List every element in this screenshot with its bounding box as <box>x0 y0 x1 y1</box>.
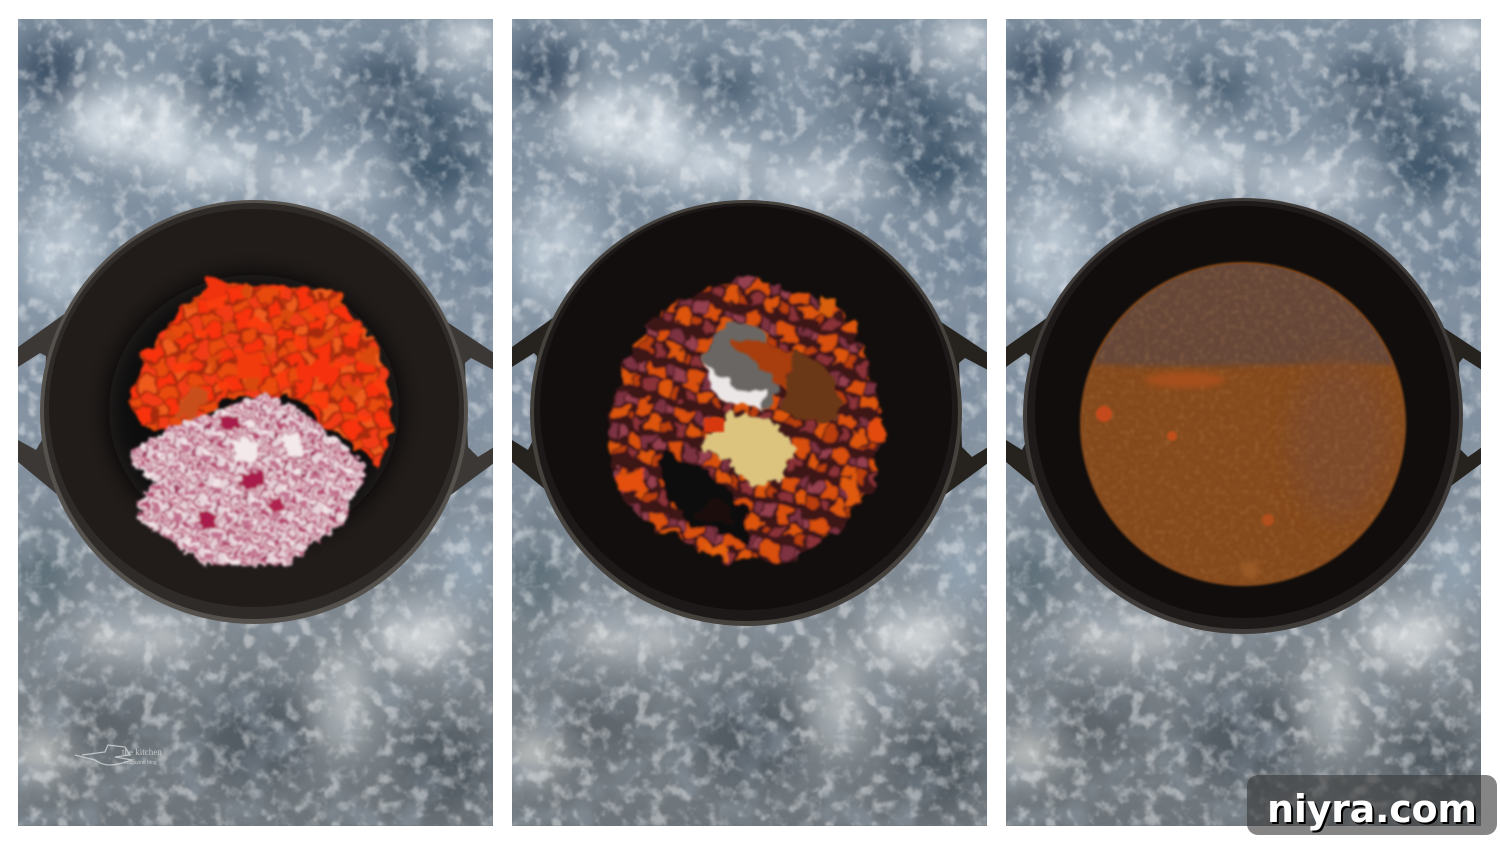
watermark logo: the kitchen <box>122 747 162 757</box>
broth liquid <box>1075 260 1415 590</box>
minced garlic <box>700 413 798 488</box>
panel: step 3 liquid in pot <box>998 19 1488 826</box>
pot body <box>1023 198 1463 634</box>
background: stone surface <box>504 19 994 826</box>
pot body <box>40 200 468 624</box>
watermark badge: niyra.com <box>1267 787 1477 831</box>
watermark badge <box>1247 775 1497 835</box>
pot body <box>530 200 962 626</box>
watermark badge: niyra.com <box>1269 789 1479 833</box>
diced vegetables mixture <box>606 278 886 562</box>
pot handles <box>512 310 988 505</box>
watermark logo <box>75 745 162 766</box>
panel: step 2 spices and garlic added <box>504 19 994 826</box>
background: stone surface <box>998 19 1488 826</box>
background: stone surface <box>10 19 500 826</box>
spices: salt and pepper <box>705 324 775 410</box>
red onion pieces <box>128 392 368 565</box>
spices: paprika and cumin <box>735 335 842 425</box>
watermark logo: magazine blog <box>124 760 157 766</box>
panel: step 1 peppers and onions in pot <box>10 19 500 826</box>
red pepper pieces <box>128 276 392 470</box>
pot handles <box>18 310 494 505</box>
pot handles <box>1006 318 1481 486</box>
